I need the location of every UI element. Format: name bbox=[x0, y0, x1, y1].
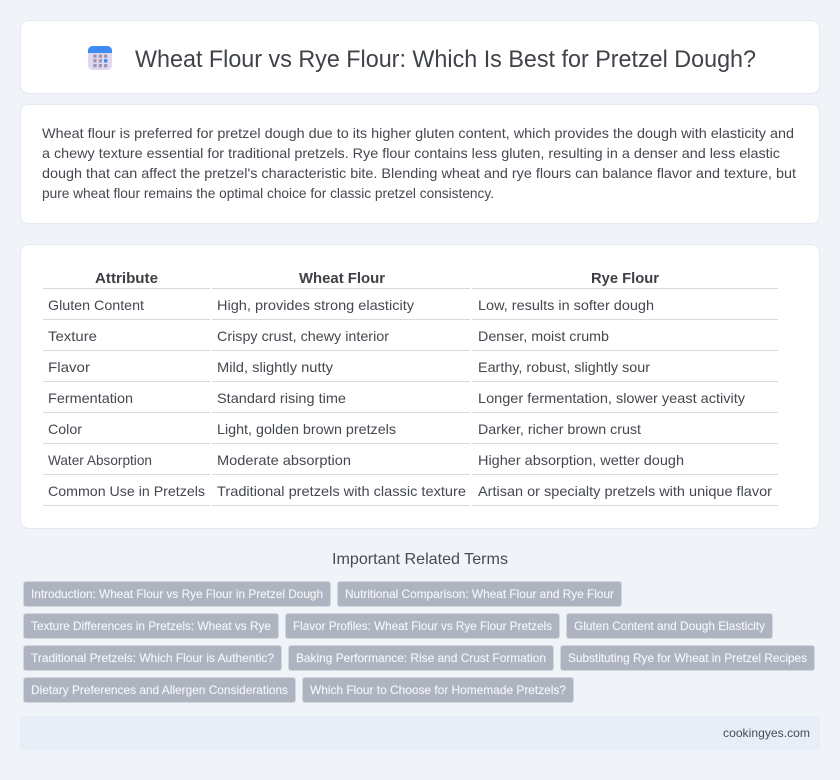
row: gluten content: Low, results in softer dough bbox=[478, 297, 654, 313]
panel: comparison table bbox=[20, 244, 820, 528]
tag: nutritional comparison: Nutritional Comparison: Wheat Flour and Rye Flour bbox=[345, 587, 614, 601]
panel: introduction text: a chewy texture essential for traditional pretzels. Rye flour contains less gluten, resulting in a denser and less elastic bbox=[42, 145, 780, 161]
row: common use in pretzels: Traditional pretzels with classic texture bbox=[217, 483, 466, 499]
row: texture: Denser, moist crumb bbox=[478, 328, 609, 344]
row: color: Color bbox=[48, 421, 82, 437]
row: fermentation: Fermentation bbox=[48, 390, 133, 406]
row: texture: Crispy crust, chewy interior bbox=[217, 328, 389, 344]
tag: baking performance bbox=[288, 646, 554, 670]
footer site name: cookingyes.com bbox=[723, 726, 810, 740]
row: common use in pretzels bbox=[48, 483, 772, 499]
row: gluten content bbox=[48, 297, 654, 313]
tag: substituting rye: Substituting Rye for Wheat in Pretzel Recipes bbox=[568, 651, 807, 665]
footer bar bbox=[20, 716, 820, 750]
row: fermentation bbox=[48, 390, 745, 406]
panel: introduction text: dough that can affect the pretzel's characteristic bite. Blending wheat and rye flours can balance flavor and texture, but bbox=[42, 165, 796, 181]
row: water absorption: Higher absorption, wetter dough bbox=[478, 452, 684, 468]
row: water absorption bbox=[48, 452, 684, 468]
row: flavor: Flavor bbox=[48, 359, 90, 375]
row: color: Darker, richer brown crust bbox=[478, 421, 641, 437]
tag: introduction: Introduction: Wheat Flour vs Rye Flour in Pretzel Dough bbox=[31, 587, 323, 601]
tag: gluten content: Gluten Content and Dough Elasticity bbox=[574, 619, 765, 633]
panel: introduction text: pure wheat flour remains the optimal choice for classic pretzel consistency. bbox=[42, 185, 494, 201]
related term tags bbox=[24, 582, 814, 702]
title: Wheat Flour vs Rye Flour: Which Is Best for Pretzel Dough? bbox=[135, 46, 756, 73]
header panel bbox=[20, 20, 820, 94]
table header row bbox=[95, 270, 659, 287]
row: flavor bbox=[48, 359, 650, 375]
row: water absorption: Moderate absorption bbox=[217, 452, 351, 468]
panel: introduction text bbox=[20, 104, 820, 224]
row: texture: Texture bbox=[48, 328, 97, 344]
row: gluten content: High, provides strong elasticity bbox=[217, 297, 414, 313]
tag: flavor profiles: Flavor Profiles: Wheat Flour vs Rye Flour Pretzels bbox=[293, 619, 552, 633]
tag: nutritional comparison bbox=[338, 582, 622, 606]
tag: texture differences bbox=[24, 614, 278, 638]
row: fermentation: Longer fermentation, slower yeast activity bbox=[478, 390, 745, 406]
table header row: Rye Flour bbox=[591, 270, 659, 287]
row: texture bbox=[48, 328, 609, 344]
row: color bbox=[48, 421, 641, 437]
tag: baking performance: Baking Performance: Rise and Crust Formation bbox=[296, 651, 546, 665]
table header row: Attribute bbox=[95, 270, 158, 287]
tag: traditional pretzels bbox=[24, 646, 282, 670]
panel: introduction text: Wheat flour is preferred for pretzel dough due to its higher gluten content, which provides the dough with elasticity and bbox=[42, 125, 794, 141]
tag: dietary preferences bbox=[24, 678, 296, 702]
row: fermentation: Standard rising time bbox=[217, 390, 346, 406]
icon: calendar bbox=[88, 46, 112, 70]
tag: texture differences: Texture Differences in Pretzels: Wheat vs Rye bbox=[31, 619, 271, 633]
tag: gluten content bbox=[566, 614, 772, 638]
row: flavor: Earthy, robust, slightly sour bbox=[478, 359, 650, 375]
heading: related terms: Important Related Terms bbox=[332, 551, 508, 568]
row: water absorption: Water Absorption bbox=[48, 452, 152, 468]
tag: substituting rye bbox=[560, 646, 814, 670]
tag: dietary preferences: Dietary Preferences and Allergen Considerations bbox=[31, 683, 288, 697]
row: gluten content: Gluten Content bbox=[48, 297, 144, 313]
tag: traditional pretzels: Traditional Pretzels: Which Flour is Authentic? bbox=[31, 651, 274, 665]
table header row: Wheat Flour bbox=[299, 270, 385, 287]
tag: which flour to choose: Which Flour to Choose for Homemade Pretzels? bbox=[310, 683, 566, 697]
tag: introduction bbox=[24, 582, 330, 606]
row: common use in pretzels: Artisan or specialty pretzels with unique flavor bbox=[478, 483, 772, 499]
tag: flavor profiles bbox=[286, 614, 560, 638]
tag: which flour to choose bbox=[302, 678, 574, 702]
row: flavor: Mild, slightly nutty bbox=[217, 359, 333, 375]
row: color: Light, golden brown pretzels bbox=[217, 421, 396, 437]
row: common use in pretzels: Common Use in Pretzels bbox=[48, 483, 205, 499]
